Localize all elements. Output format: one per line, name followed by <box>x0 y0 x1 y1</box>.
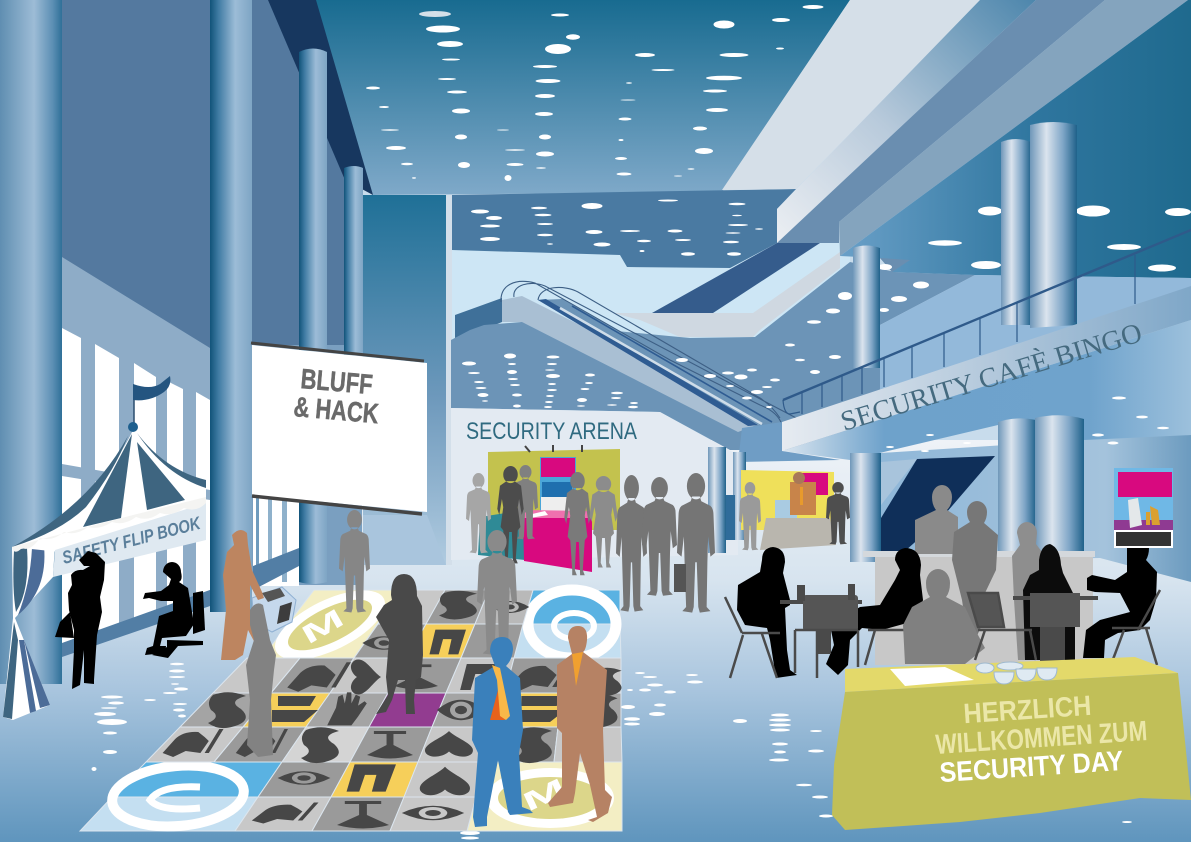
main ceiling <box>272 0 850 195</box>
person grey arena left <box>466 473 491 553</box>
wall behind balcony <box>880 275 1191 430</box>
arena booth <box>478 445 620 572</box>
gradient beam <box>777 0 1036 243</box>
lower pillar right small <box>850 453 881 562</box>
hanging ceiling panel <box>452 189 796 268</box>
soffit spots <box>886 396 1169 452</box>
person grey woman on mat <box>246 603 276 757</box>
tent roof <box>12 430 206 552</box>
foreground chair <box>968 593 1036 660</box>
booth dark visitor <box>826 482 850 544</box>
back pillars <box>708 447 746 553</box>
person seated at laptop <box>143 562 205 658</box>
upper pillar right wide <box>1030 122 1077 328</box>
escalator <box>501 281 800 432</box>
cafe chairs <box>725 590 1160 678</box>
person dark woman at arena <box>497 466 524 563</box>
arena wall <box>451 408 738 560</box>
balcony beam near escalator <box>738 422 840 462</box>
person black left table <box>737 547 797 678</box>
table right with stool <box>1013 593 1098 661</box>
big corner tile top left: M <box>296 602 349 650</box>
big corner tile bottom right <box>467 762 622 831</box>
big corner tile bottom left <box>80 760 282 832</box>
escalator wall <box>451 298 540 340</box>
cafe scene <box>725 485 1160 678</box>
tent safety flip book <box>3 376 206 720</box>
person grey man on mat <box>477 530 517 655</box>
person dark woman on mat <box>376 574 423 714</box>
person black woman photographing <box>55 551 105 689</box>
tent banner <box>53 503 206 577</box>
person seated woman <box>1023 544 1075 660</box>
person grey seated foreground <box>903 569 985 664</box>
ceiling spots <box>366 5 1191 408</box>
pillar back one <box>299 48 327 584</box>
floor game mat <box>80 576 622 832</box>
upper light beam <box>722 0 980 190</box>
tent curtain <box>3 543 55 720</box>
group of three grey men <box>616 473 715 613</box>
navy wall panel <box>881 456 995 551</box>
light stripes near navy <box>881 459 917 505</box>
sign text: BLUFF <box>299 363 374 400</box>
tent pole and ball <box>128 385 138 432</box>
table top <box>845 657 1178 692</box>
central block <box>363 195 452 565</box>
person brown man <box>548 626 612 822</box>
mid beam <box>777 0 1105 243</box>
tent valance <box>12 497 206 552</box>
pillar far left <box>0 0 62 684</box>
person blue man <box>472 637 533 827</box>
windows <box>62 328 210 657</box>
pale beam <box>839 0 1188 256</box>
lower pillars right <box>998 415 1084 555</box>
back booth <box>726 470 850 550</box>
balcony railing <box>783 230 1191 414</box>
floor <box>0 440 1191 842</box>
person walking at sign <box>339 510 370 612</box>
flip book cube <box>252 587 296 632</box>
welcome text: SECURITY DAY <box>939 745 1124 788</box>
tile icons <box>163 591 622 828</box>
person brown with lanyard <box>221 530 268 660</box>
sky behind <box>452 240 850 420</box>
back windows under sign <box>253 498 299 590</box>
checker tiles <box>146 590 622 831</box>
right ceiling <box>840 0 1191 278</box>
papers <box>890 667 974 686</box>
booth visitor <box>739 482 761 550</box>
big corner tile top right <box>514 590 621 658</box>
booth host <box>790 472 816 515</box>
cups <box>976 662 1057 684</box>
welcome table <box>832 657 1191 830</box>
cafe poster <box>1114 468 1173 548</box>
bar counter <box>863 551 1095 665</box>
person woman with dress <box>590 476 618 567</box>
person behind table <box>513 465 538 539</box>
balcony soffit and right wall <box>782 320 1191 582</box>
sign text <box>292 363 380 429</box>
navy ceiling edge <box>268 0 373 195</box>
heading: security arena: SECURITY ARENA <box>466 418 637 445</box>
welcome text <box>935 690 1148 788</box>
standing grey people at bar <box>915 485 1045 660</box>
pillar back two <box>344 166 363 360</box>
balcony front band <box>782 286 1191 451</box>
ceiling right lower <box>451 262 975 450</box>
table left with stool <box>780 584 862 654</box>
person black middle <box>826 548 923 675</box>
person woman in front of booth <box>564 472 591 575</box>
big corner tile bottom right: M <box>518 772 570 817</box>
welcome text: HERZLICH <box>962 690 1092 729</box>
table front <box>832 673 1191 830</box>
tent flag <box>133 376 170 400</box>
upper pillar right small <box>853 246 880 368</box>
floor reflections <box>92 663 1132 840</box>
ceiling facet <box>880 258 910 272</box>
bluff and hack sign <box>251 343 427 514</box>
big corner tile top left <box>262 576 401 674</box>
beam over gallery <box>613 243 840 337</box>
sign text: & HACK <box>292 391 380 429</box>
person black right <box>1083 534 1157 658</box>
left wall <box>60 0 363 655</box>
upper pillar right <box>1001 139 1031 325</box>
tent banner text: SAFETY FLIP BOOK <box>60 513 204 568</box>
heading: security cafe bingo: SECURITY CAFÈ BINGO <box>837 318 1146 438</box>
pillar mid <box>210 0 252 612</box>
